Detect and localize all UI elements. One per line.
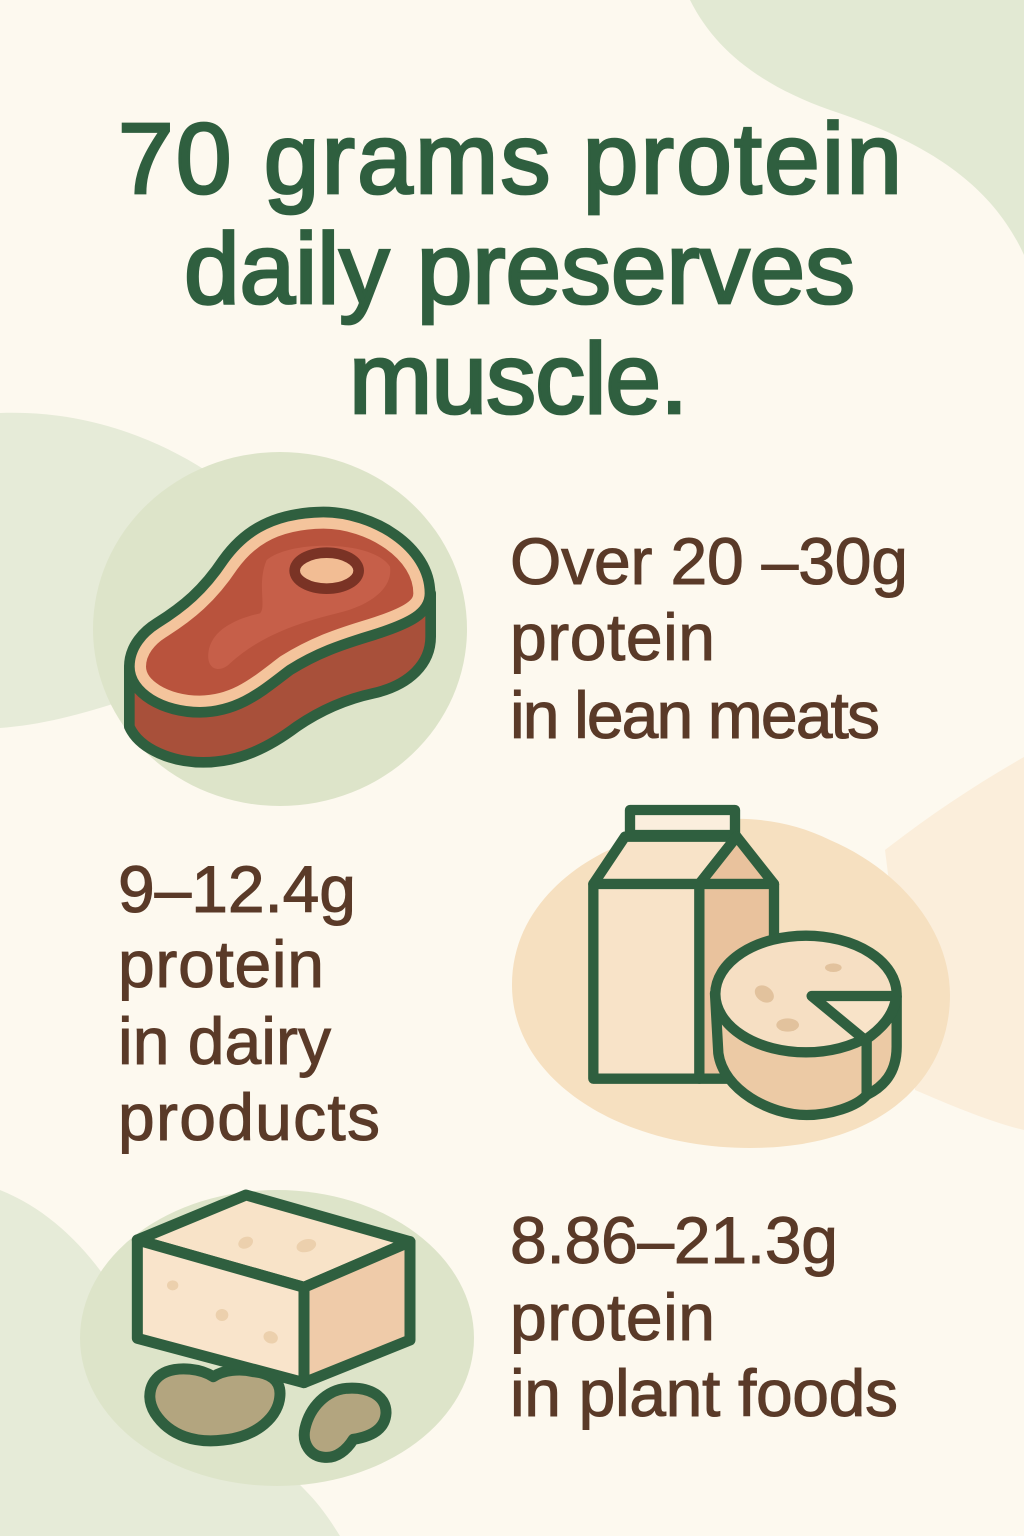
background blob: middle right: [885, 757, 1024, 1130]
background blob: bottom left: [0, 1190, 340, 1536]
panel: plant foods icon: [80, 1190, 474, 1486]
text: dairy products: protein: [118, 927, 324, 1001]
title: daily preserves: [184, 213, 855, 325]
text: plant foods: in plant foods: [510, 1356, 898, 1430]
icon background circle: meat: [93, 452, 467, 806]
title: muscle.: [349, 323, 688, 435]
text: lean meats: protein: [510, 600, 715, 674]
text: dairy products: in dairy: [118, 1004, 331, 1078]
background blob: middle left: [0, 413, 205, 728]
background blob: top right: [690, 0, 1024, 255]
text: lean meats: Over 20 –30g: [510, 524, 908, 598]
title: [118, 103, 902, 435]
icon: steak: [129, 512, 431, 762]
text: dairy products: 9–12.4g: [118, 852, 356, 926]
title: 70 grams protein: [118, 103, 902, 215]
text: plant foods: [510, 1203, 898, 1430]
panel: lean meats icon: [93, 452, 467, 806]
icon: milk carton and cheese: [593, 810, 897, 1115]
text: lean meats: [510, 524, 908, 752]
icon background blob: dairy: [512, 819, 950, 1148]
text: plant foods: 8.86–21.3g: [510, 1203, 838, 1277]
text: lean meats: in lean meats: [510, 678, 880, 752]
text: dairy products: products: [118, 1080, 380, 1154]
text: plant foods: protein: [510, 1280, 715, 1354]
panel: dairy icon: [512, 810, 950, 1148]
icon background blob: plant: [80, 1190, 474, 1486]
text: dairy products: [118, 852, 380, 1154]
icon: tofu block and beans: [137, 1195, 410, 1457]
